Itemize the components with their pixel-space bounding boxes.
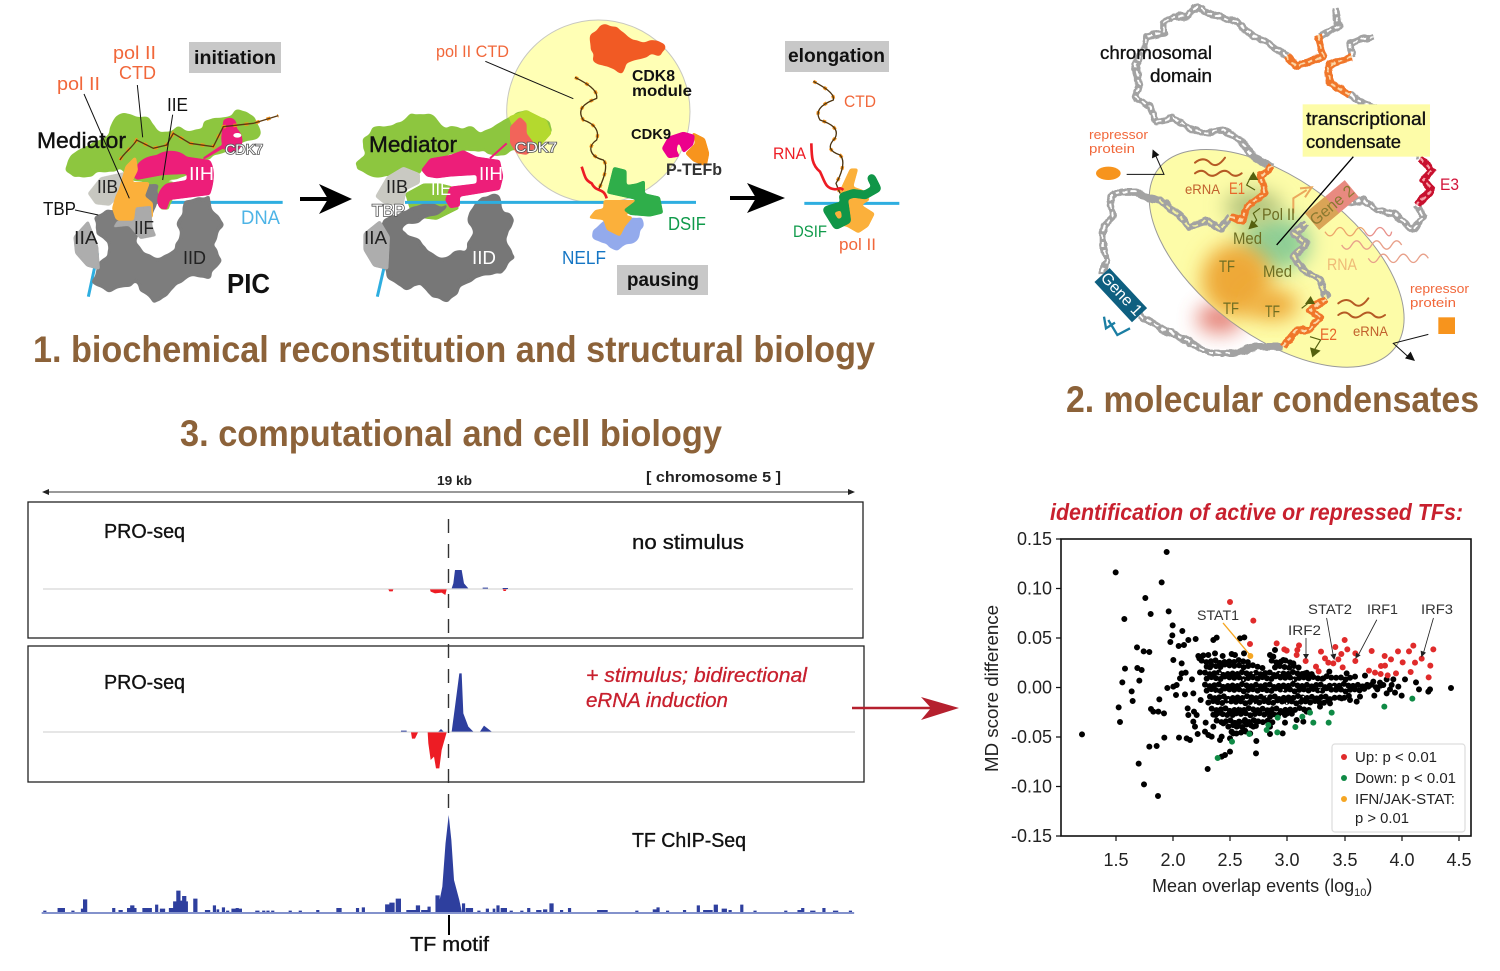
IIB shape xyxy=(375,167,420,207)
red up points xyxy=(1230,602,1433,677)
CTD leader line xyxy=(485,61,573,99)
label: no stimulus: no stimulus xyxy=(632,532,744,554)
black points xyxy=(1082,552,1451,796)
panel: scatter plot xyxy=(982,499,1472,899)
component labels: TBP xyxy=(372,201,405,220)
component labels: IIA xyxy=(364,228,387,248)
DNA line xyxy=(377,202,696,297)
CDK9 shape xyxy=(662,132,695,158)
x axis tick labels: 3.5 xyxy=(1332,850,1358,870)
component labels xyxy=(364,132,557,268)
data points xyxy=(1082,552,1451,796)
elongation protein shapes xyxy=(804,81,899,233)
component labels: CDK7 xyxy=(515,139,557,155)
label: initiation xyxy=(189,42,281,73)
IIF shape xyxy=(112,205,157,240)
heading 1: 1. biochemical reconstitution and structural biology xyxy=(33,329,875,370)
labels inside condensate: RNA xyxy=(1327,255,1358,274)
label: pausing: pausing xyxy=(627,270,699,291)
CDK8 module shape xyxy=(590,25,665,75)
label: transcriptional condensate: transcriptional xyxy=(1306,109,1426,129)
x axis tick labels: 3.0 xyxy=(1274,850,1300,870)
motif dashed guide line xyxy=(448,519,450,815)
label: repressor protein left xyxy=(1089,127,1149,156)
labels inside condensate: Med xyxy=(1233,229,1262,248)
heading 3: 3. computational and cell biology xyxy=(180,413,722,454)
label: chromosomal domain: chromosomal xyxy=(1100,43,1212,63)
yellow condensate circle xyxy=(507,20,690,203)
green down points xyxy=(1218,699,1412,758)
legend: p > 0.01 xyxy=(1355,811,1409,827)
component labels: TBP xyxy=(43,199,76,219)
component labels: IIF xyxy=(134,218,154,238)
label: repressor protein right: protein xyxy=(1410,295,1456,310)
labels inside condensate xyxy=(1185,179,1389,344)
x axis tick labels: 4.0 xyxy=(1389,850,1415,870)
label: pol II: pol II xyxy=(839,235,876,254)
pol II shape xyxy=(113,158,152,223)
legend: Up: p < 0.01 xyxy=(1355,750,1437,766)
pausing protein shapes xyxy=(355,20,709,303)
component labels: IIB xyxy=(97,177,118,197)
P-TEFb shape xyxy=(685,132,709,167)
label: repressor protein left: repressor xyxy=(1089,127,1149,142)
blue sense signal xyxy=(401,570,508,732)
label: CTD: CTD xyxy=(844,92,876,111)
label: TF motif: TF motif xyxy=(410,934,489,956)
y axis tick labels xyxy=(1011,529,1052,846)
orange STAT1 point and leader xyxy=(1223,623,1250,655)
labels inside condensate: eRNA xyxy=(1353,323,1389,339)
x axis tick labels: 2.5 xyxy=(1217,850,1243,870)
TF motif tick xyxy=(448,915,450,935)
label: pol II CTD xyxy=(113,43,156,83)
arrow: pausing to elongation xyxy=(730,196,768,200)
label: chromosomal domain: domain xyxy=(1150,66,1212,86)
arrow head: pausing to elongation xyxy=(747,183,785,213)
annotation labels: STAT2 xyxy=(1308,601,1352,617)
labels inside condensate: TF xyxy=(1265,302,1280,321)
x axis tick labels: 4.5 xyxy=(1446,850,1472,870)
panel: pausing complex xyxy=(355,20,722,303)
legend: Down: p < 0.01 xyxy=(1355,771,1456,787)
x axis title: 10 xyxy=(1354,887,1366,899)
PRO-seq signal peaks xyxy=(388,570,508,768)
labels inside condensate: E1 xyxy=(1229,179,1245,198)
component labels: IID xyxy=(183,248,206,268)
component labels: IIH xyxy=(479,164,503,184)
label: pol II CTD: CTD xyxy=(119,63,156,83)
labels inside condensate: E2 xyxy=(1320,325,1337,344)
panel: initiation complex (PIC) xyxy=(37,42,283,303)
label: pol II: pol II xyxy=(57,74,100,94)
label: plus stimulus: eRNA induction xyxy=(586,690,728,712)
arrow head: initiation to pausing xyxy=(319,184,352,214)
DSIF shape xyxy=(607,167,663,217)
x axis tick labels xyxy=(1103,850,1472,870)
annotation labels: STAT1 xyxy=(1197,607,1239,623)
y axis tick labels: -0.05 xyxy=(1011,727,1052,747)
CDK7 shape xyxy=(202,118,242,160)
nascent RNA xyxy=(582,167,607,198)
legend xyxy=(1332,744,1465,832)
condensate drawing xyxy=(1094,7,1455,410)
panel: elongation complex xyxy=(773,41,899,254)
labels inside condensate: Pol II xyxy=(1262,205,1295,224)
component labels: CDK7 xyxy=(225,141,263,157)
labels inside condensate: TF xyxy=(1223,299,1239,318)
component labels: DNA xyxy=(241,208,280,229)
track box: no stimulus xyxy=(28,502,863,638)
pointer line xyxy=(1277,157,1353,245)
y axis tick labels: 0.05 xyxy=(1017,628,1052,648)
panel: genome browser tracks xyxy=(28,469,864,956)
x axis tick labels: 2.0 xyxy=(1160,850,1186,870)
red blob behind condensate xyxy=(1197,303,1243,333)
label: TF ChIP-Seq: TF ChIP-Seq xyxy=(632,830,746,852)
label: repressor protein right xyxy=(1410,281,1470,310)
y axis tick labels: 0.00 xyxy=(1017,678,1052,698)
annotation labels xyxy=(1197,601,1453,638)
label: transcriptional condensate: condensate xyxy=(1306,132,1401,152)
repressor protein square xyxy=(1438,317,1455,334)
CTD tail xyxy=(575,77,606,190)
label: CDK8 module: CDK8 xyxy=(632,68,675,85)
label: transcriptional condensate xyxy=(1306,109,1426,152)
label: PRO-seq bottom: PRO-seq xyxy=(104,672,185,694)
Mediator overlap in condensate xyxy=(508,110,552,150)
y axis title: MD score difference xyxy=(982,605,1002,772)
annotation labels: IRF3 xyxy=(1421,601,1453,617)
component labels: IIA xyxy=(74,228,98,248)
annotation labels: IRF1 xyxy=(1367,601,1398,617)
repressor arrows xyxy=(1127,154,1428,358)
annotation arrows xyxy=(1306,618,1433,656)
label: CDK8 module xyxy=(632,68,692,100)
IIH shape xyxy=(421,150,503,208)
coloured interior blobs xyxy=(1202,190,1310,320)
label: RNA: RNA xyxy=(773,144,807,163)
track baselines xyxy=(43,589,855,732)
label: pol II CTD: pol II CTD xyxy=(436,42,509,61)
label: E3: E3 xyxy=(1440,175,1459,194)
nascent RNA xyxy=(811,143,843,190)
labels inside condensate: Med xyxy=(1263,262,1292,281)
chromatin strands gray xyxy=(1102,7,1432,353)
label: initiation: initiation xyxy=(194,48,276,69)
component labels: IIE xyxy=(431,179,451,199)
enhancers orange and E3 red xyxy=(1230,35,1352,347)
x axis title: Mean overlap events (log xyxy=(1152,876,1354,896)
gray IID shape xyxy=(380,195,515,303)
label: PRO-seq top: PRO-seq xyxy=(104,521,185,543)
x axis tick labels: 1.5 xyxy=(1103,850,1129,870)
transcriptional condensate label box xyxy=(1303,104,1430,157)
IID and general factors gray shape xyxy=(93,183,225,303)
label: NELF: NELF xyxy=(562,248,606,268)
arrow: initiation to pausing xyxy=(300,197,334,201)
legend: IFN/JAK-STAT: xyxy=(1355,792,1455,808)
labels inside condensate: eRNA xyxy=(1185,181,1221,197)
gaps in dense core xyxy=(1217,668,1333,707)
panel: molecular condensates diagram xyxy=(1089,7,1470,410)
NELF shape xyxy=(592,217,645,253)
pol II shape xyxy=(830,168,875,233)
y axis tick labels: 0.10 xyxy=(1017,578,1052,598)
olive transcription arrows xyxy=(1247,175,1321,352)
component labels: IID xyxy=(472,248,496,268)
RNA wavy lines xyxy=(1325,227,1365,236)
y axis tick labels: -0.15 xyxy=(1011,826,1052,846)
label: plus stimulus: + stimulus; bidirectional xyxy=(586,665,808,687)
arrow: tracks to scatter plot xyxy=(852,697,959,720)
repressor protein oval xyxy=(1096,167,1121,180)
IIA shape xyxy=(363,220,390,270)
Mediator shape xyxy=(65,112,259,210)
PIC protein shapes xyxy=(65,85,283,303)
dense core of black points xyxy=(1202,660,1382,734)
pol II shape xyxy=(588,200,640,237)
eRNA wavy lines xyxy=(1195,158,1385,317)
plot frame and ticks xyxy=(1056,539,1471,841)
label: plus stimulus xyxy=(586,665,808,712)
ChIP-seq signal xyxy=(42,815,854,914)
Gene 2 box: Gene 2 xyxy=(1307,182,1358,229)
component labels: IIE xyxy=(167,95,188,115)
plot title: identification of active or repressed TFs: xyxy=(1050,499,1463,525)
leader lines xyxy=(75,85,173,215)
label: repressor protein right: repressor xyxy=(1410,281,1470,296)
CTD tail xyxy=(813,81,843,193)
label: pol II CTD: pol II xyxy=(113,43,156,63)
yellow condensate ellipse xyxy=(1111,107,1442,410)
scale arrow xyxy=(42,489,855,495)
Gene 1 start arrow xyxy=(1104,317,1130,335)
component labels: IIH xyxy=(189,164,214,184)
component labels xyxy=(37,95,280,299)
lower Mediator xyxy=(405,183,460,220)
Gene 2 start arrow xyxy=(1293,187,1312,213)
label: DSIF: DSIF xyxy=(793,222,827,241)
Mediator shape xyxy=(355,110,552,177)
component labels: Mediator xyxy=(369,132,457,157)
label: P-TEFb: P-TEFb xyxy=(666,160,722,179)
IIB shape xyxy=(87,170,133,207)
DNA line xyxy=(804,199,899,208)
y axis tick labels: 0.15 xyxy=(1017,529,1052,549)
label: DSIF: DSIF xyxy=(668,214,706,234)
label: chromosomal domain xyxy=(1100,43,1212,86)
label: repressor protein left: protein xyxy=(1089,141,1135,156)
label: pausing xyxy=(617,265,708,295)
annotation labels: IRF2 xyxy=(1288,622,1321,638)
labels inside condensate: TF xyxy=(1219,257,1235,276)
Gene 1 box: Gene 1 xyxy=(1097,270,1145,320)
component labels: PIC xyxy=(227,268,270,299)
y axis tick labels: -0.10 xyxy=(1011,776,1052,796)
DNA line xyxy=(88,202,283,297)
label: 19 kb: 19 kb xyxy=(437,473,472,488)
DSIF shape xyxy=(827,178,877,225)
label: elongation xyxy=(785,41,889,72)
label: elongation: elongation xyxy=(788,46,885,67)
CDK7 shape xyxy=(510,117,537,155)
component labels: Mediator xyxy=(37,128,126,153)
track box: plus stimulus xyxy=(28,646,864,782)
red antisense signal xyxy=(388,589,507,768)
label: CDK8 module: module xyxy=(632,83,692,100)
label: chromosome 5: [ chromosome 5 ] xyxy=(646,469,781,486)
CTD tail xyxy=(120,116,278,160)
IIA shape xyxy=(73,220,100,270)
component labels: IIB xyxy=(386,177,408,197)
label: CDK9: CDK9 xyxy=(631,126,671,143)
x axis title: ) xyxy=(1366,876,1372,896)
IIH shape xyxy=(133,151,214,210)
